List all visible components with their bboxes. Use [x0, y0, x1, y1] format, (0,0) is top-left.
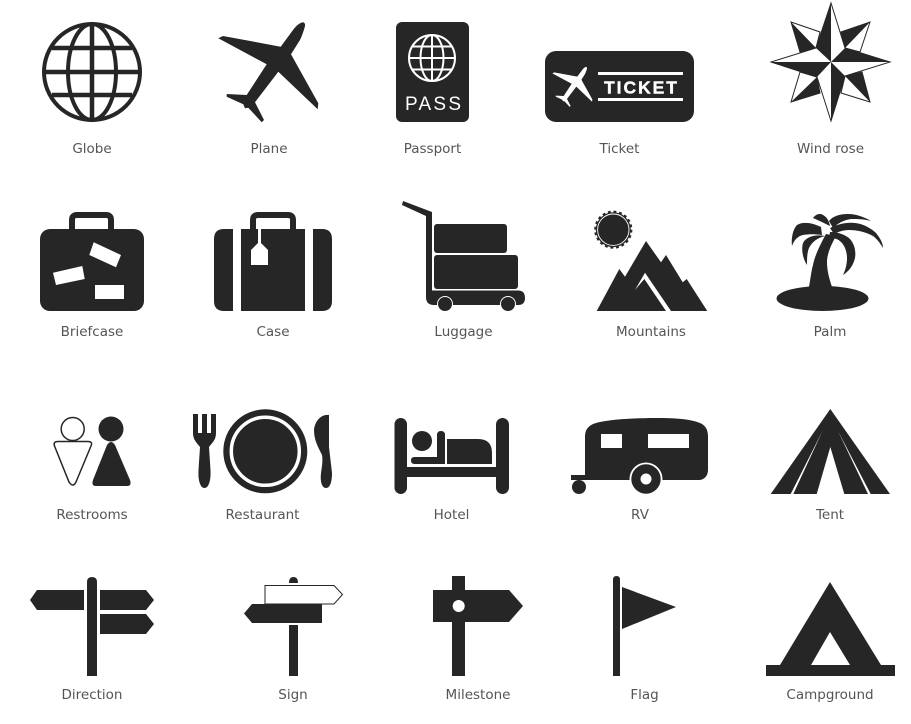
icon: restaurant	[193, 409, 332, 523]
icon: plane: Plane	[250, 141, 288, 157]
icon: ticket: TICKET	[604, 78, 677, 98]
icon: ticket: Ticket	[599, 141, 639, 157]
icon: palm	[776, 214, 883, 340]
icon: case: Case	[256, 324, 290, 340]
icon: passport: PASS	[405, 94, 461, 115]
icon: direction signpost: Direction	[62, 687, 122, 703]
icon: briefcase: Briefcase	[61, 324, 123, 340]
icon: briefcase	[40, 215, 144, 340]
icon: globe	[44, 24, 140, 157]
icon: sign	[244, 577, 342, 703]
icon: wind rose	[771, 3, 890, 157]
icon: case	[214, 215, 332, 340]
icon: wind rose: Wind rose	[797, 141, 864, 157]
icon: luggage cart	[402, 201, 525, 340]
icon: mountains	[595, 212, 707, 340]
icon: campground	[766, 582, 895, 703]
icon: palm: Palm	[814, 324, 846, 340]
icon: restrooms: Restrooms	[56, 507, 128, 523]
icon: RV trailer: RV	[631, 507, 650, 523]
icon: plane	[218, 22, 318, 157]
icon: tent	[771, 409, 890, 523]
icon: hotel bed	[394, 418, 509, 523]
icon: luggage cart: Luggage	[434, 324, 493, 340]
icon: passport: Passport	[404, 141, 461, 157]
icon: hotel bed: Hotel	[434, 507, 469, 523]
icon: restrooms	[54, 416, 131, 523]
icon: milestone	[433, 576, 523, 703]
icon: mountains: Mountains	[616, 324, 686, 340]
icon: campground: Campground	[786, 687, 874, 703]
icon: RV trailer	[571, 418, 708, 523]
icon: tent: Tent	[815, 507, 844, 523]
icon: passport	[396, 22, 469, 157]
icon: direction signpost	[30, 577, 154, 703]
icon: flag	[613, 576, 676, 703]
icon: flag: Flag	[630, 687, 659, 703]
icon: sign: Sign	[278, 687, 308, 703]
icon: milestone: Milestone	[446, 687, 510, 703]
icon: restaurant: Restaurant	[226, 507, 299, 523]
icon: ticket	[545, 51, 694, 157]
icon: globe: Globe	[72, 141, 112, 157]
